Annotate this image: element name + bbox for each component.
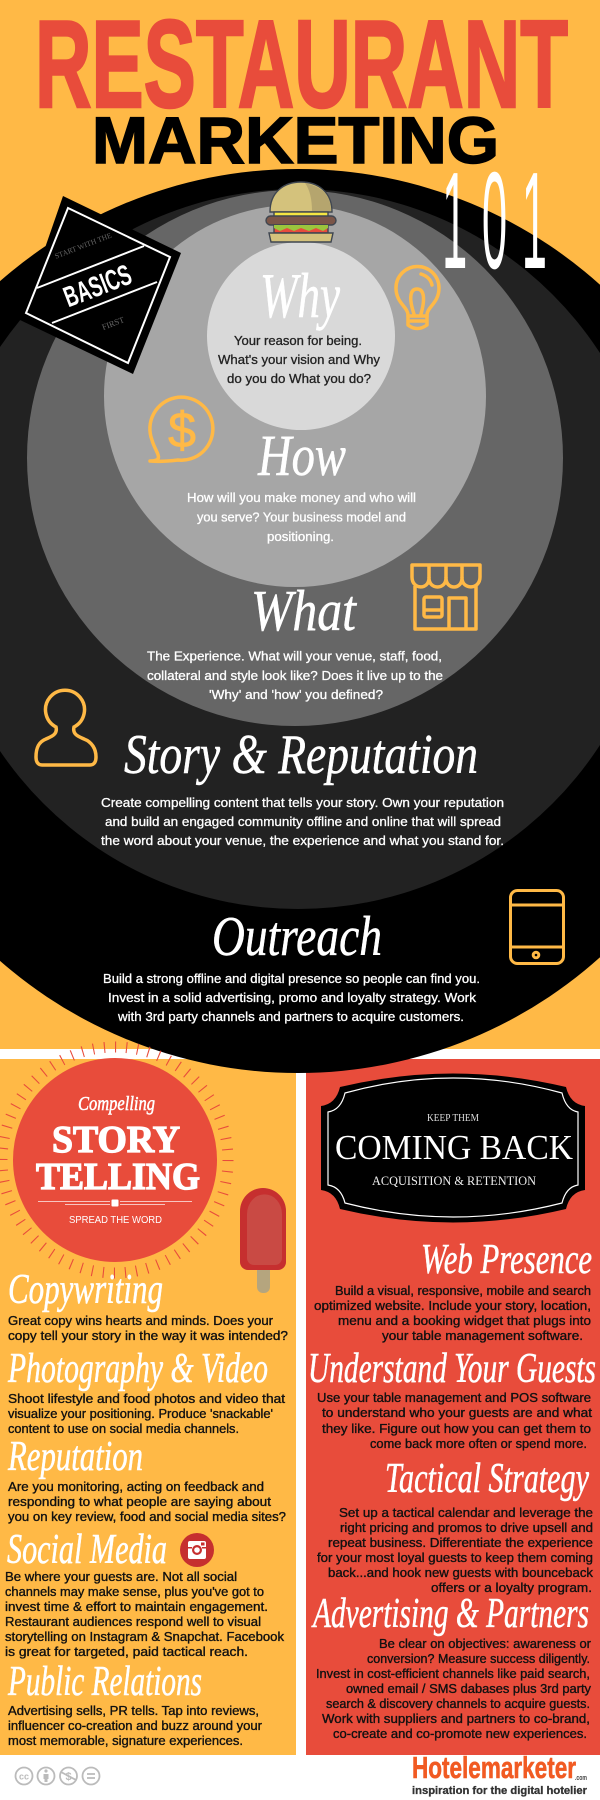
heading: story and reputation: Story & Reputation: [124, 724, 478, 786]
section: reputation: [7, 1434, 286, 1524]
text: understand body: they like. Figure out how you can get them to: [322, 1422, 591, 1436]
section: social media: [5, 1527, 285, 1659]
text: understand body: come back more often or spend more.: [370, 1437, 587, 1451]
text: reputation body: Are you monitoring, acting on feedback and: [8, 1480, 264, 1494]
badge: basics: FIRST: [100, 314, 126, 332]
concentric circles: [0, 169, 600, 1073]
icon: dollar speech bubble: [150, 397, 213, 461]
text: social media body: Be where your guests are. Not all social: [5, 1570, 237, 1584]
badge: basics: [20, 196, 181, 374]
heading: why: Why: [260, 260, 340, 331]
icon: light bulb: [396, 266, 439, 328]
icons: creative commons: $: [65, 1771, 72, 1783]
badge: compelling storytelling: STORY: [52, 1119, 180, 1161]
text: advertising body: Be clear on objectives: awareness or: [379, 1637, 591, 1651]
panel: story and reputation: [101, 724, 504, 848]
icon: store: [412, 565, 480, 629]
icon: dollar speech bubble: $: [168, 402, 196, 458]
text: why body: What's your vision and Why: [218, 352, 380, 367]
heading: photography and video: Photography & Video: [7, 1346, 268, 1392]
text: how body: positioning.: [267, 529, 334, 544]
icon: instagram: [180, 1533, 214, 1567]
heading: what: What: [251, 578, 358, 643]
text: web presence body: [314, 1284, 591, 1343]
section: tactical strategy: [317, 1456, 594, 1595]
panel: why: [218, 260, 380, 386]
text: public relations body: most memorable, signature experiences.: [8, 1734, 243, 1748]
text: photography body: Shoot lifestyle and food photos and video that: [8, 1392, 286, 1406]
text: public relations body: [8, 1704, 262, 1748]
heading: outreach: Outreach: [212, 906, 382, 968]
heading: public relations: Public Relations: [7, 1659, 202, 1705]
panel: outreach: [103, 906, 480, 1024]
text: why body: Your reason for being.: [234, 333, 362, 348]
logo: hotelemarketer: inspiration for the digital hotelier: [412, 1785, 588, 1797]
text: advertising body: Invest in cost-efficient channels like paid search,: [316, 1667, 590, 1681]
logo: hotelemarketer: .com: [575, 1775, 587, 1782]
icon: tablet: [510, 890, 564, 964]
icon: popsicle: [240, 1188, 286, 1293]
icons: creative commons: [16, 1768, 100, 1784]
text: copywriting body: copy tell your story in the way it was intended?: [8, 1329, 288, 1343]
badge: basics: START WITH THE: [53, 231, 113, 261]
badge: compelling storytelling: Compelling: [78, 1093, 155, 1115]
text: understand body: Use your table management and POS software: [317, 1391, 591, 1405]
text: tactical body: [317, 1506, 594, 1595]
text: what body: 'Why' and 'how' you defined?: [209, 687, 383, 702]
panel: coming back background: [306, 1059, 600, 1755]
panel: what: [147, 578, 443, 702]
text: web presence body: menu and a booking widget that plugs into: [338, 1314, 591, 1328]
text: advertising body: [316, 1637, 592, 1741]
text: advertising body: owned email / SMS dabases plus 3rd party: [346, 1682, 592, 1696]
text: copywriting body: Great copy wins hearts and minds. Does your: [8, 1314, 273, 1328]
text: advertising body: search & discovery channels to acquire guests.: [326, 1697, 590, 1711]
text: story body: [101, 795, 504, 848]
text: how body: you serve? Your business model and: [197, 510, 406, 524]
icon: person: [36, 690, 96, 765]
section: photography and video: [7, 1346, 286, 1436]
text: outreach body: Invest in a solid advertising, promo and loyalty strategy. Work: [108, 990, 477, 1005]
text: social media body: channels may make sense, plus you've got to: [5, 1585, 264, 1599]
plaque: coming back: [321, 1074, 585, 1222]
text: web presence body: your table management software.: [382, 1329, 583, 1343]
section: copywriting: [8, 1267, 288, 1343]
badge: compelling storytelling: [2, 1047, 228, 1273]
text: story body: and build an engaged community offline and online that will spread: [105, 814, 501, 829]
text: photography body: [8, 1392, 286, 1436]
plaque: coming back: COMING BACK: [335, 1128, 573, 1167]
text: advertising body: conversion? Measure success diligently.: [367, 1652, 590, 1666]
text: understand body: [317, 1391, 593, 1451]
badge: basics: BASICS: [59, 259, 136, 314]
title: 101: 101: [442, 143, 562, 298]
text: photography body: visualize your positioning. Produce 'snackable': [8, 1407, 273, 1421]
plaque: coming back: KEEP THEM: [427, 1113, 479, 1124]
text: tactical body: offers or a loyalty program.: [431, 1581, 592, 1595]
badge: compelling storytelling: TELLING: [36, 1156, 200, 1198]
heading: reputation: Reputation: [7, 1434, 143, 1480]
text: copywriting body: [8, 1314, 288, 1343]
text: tactical body: repeat business. Differentiate the experience: [328, 1536, 593, 1550]
text: public relations body: influencer co-creation and buzz around your: [8, 1719, 262, 1733]
heading: how: How: [257, 423, 346, 488]
text: social media body: invest time & effort to maintain engagement.: [5, 1600, 268, 1614]
text: social media body: [5, 1570, 285, 1659]
text: outreach body: with 3rd party channels and partners to acquire customers.: [117, 1009, 464, 1024]
text: understand body: to understand who your guests are and what: [322, 1406, 593, 1420]
text: story body: the word about your venue, the experience and what you stand for.: [101, 833, 504, 848]
panel: storytelling background: [0, 1059, 296, 1755]
text: advertising body: co-create and co-promote new experiences.: [333, 1727, 587, 1741]
heading: copywriting: Copywriting: [8, 1267, 163, 1313]
text: story body: Create compelling content that tells your story. Own your reputation: [101, 795, 504, 810]
section: web presence: [314, 1237, 592, 1343]
text: how body: [187, 490, 416, 544]
text: outreach body: [103, 971, 480, 1024]
section: public relations: [7, 1659, 262, 1748]
text: what body: The Experience. What will your venue, staff, food,: [147, 648, 442, 664]
heading: social media: Social Media: [7, 1527, 167, 1573]
text: public relations body: Advertising sells, PR tells. Tap into reviews,: [8, 1704, 259, 1718]
text: outreach body: Build a strong offline and digital presence so people can find you.: [103, 971, 480, 986]
section: advertising and partners: [311, 1591, 592, 1741]
text: tactical body: right pricing and promos to drive upsell and: [340, 1521, 593, 1535]
text: tactical body: Set up a tactical calendar and leverage the: [339, 1506, 593, 1520]
text: why body: do you do What you do?: [227, 371, 371, 386]
icons: creative commons: cc: [19, 1772, 29, 1782]
text: how body: How will you make money and who will: [187, 490, 416, 505]
text: social media body: storytelling on Instagram & Snapchat. Facebook: [5, 1630, 285, 1644]
text: what body: collateral and style look like? Does it live up to the: [147, 668, 443, 683]
text: reputation body: you on key review, food and social media sites?: [8, 1510, 286, 1524]
plaque: coming back: ACQUISITION & RETENTION: [372, 1173, 537, 1188]
text: reputation body: [8, 1480, 286, 1524]
text: photography body: content to use on social media channels.: [8, 1422, 239, 1436]
text: why body: [218, 333, 380, 386]
text: tactical body: back...and hook new guests with bounceback: [328, 1566, 594, 1580]
text: reputation body: responding to what people are saying about: [8, 1495, 272, 1509]
section: understand your guests: [308, 1346, 596, 1451]
text: social media body: is great for targeted, paid tactical reach.: [5, 1645, 248, 1659]
text: web presence body: optimized website. Include your story, location,: [314, 1299, 591, 1313]
icon: burger: [266, 182, 336, 242]
text: advertising body: Work with suppliers and partners to co-brand,: [322, 1712, 590, 1726]
text: social media body: Restaurant audiences respond well to visual: [5, 1615, 261, 1629]
text: web presence body: Build a visual, responsive, mobile and search: [335, 1284, 591, 1298]
badge: compelling storytelling: SPREAD THE WORD: [69, 1214, 162, 1226]
text: tactical body: for your most loyal guests to keep them coming: [317, 1551, 593, 1565]
title: Marketing: MARKETING: [92, 103, 499, 177]
text: what body: [147, 648, 443, 702]
panel: how: [187, 423, 416, 544]
